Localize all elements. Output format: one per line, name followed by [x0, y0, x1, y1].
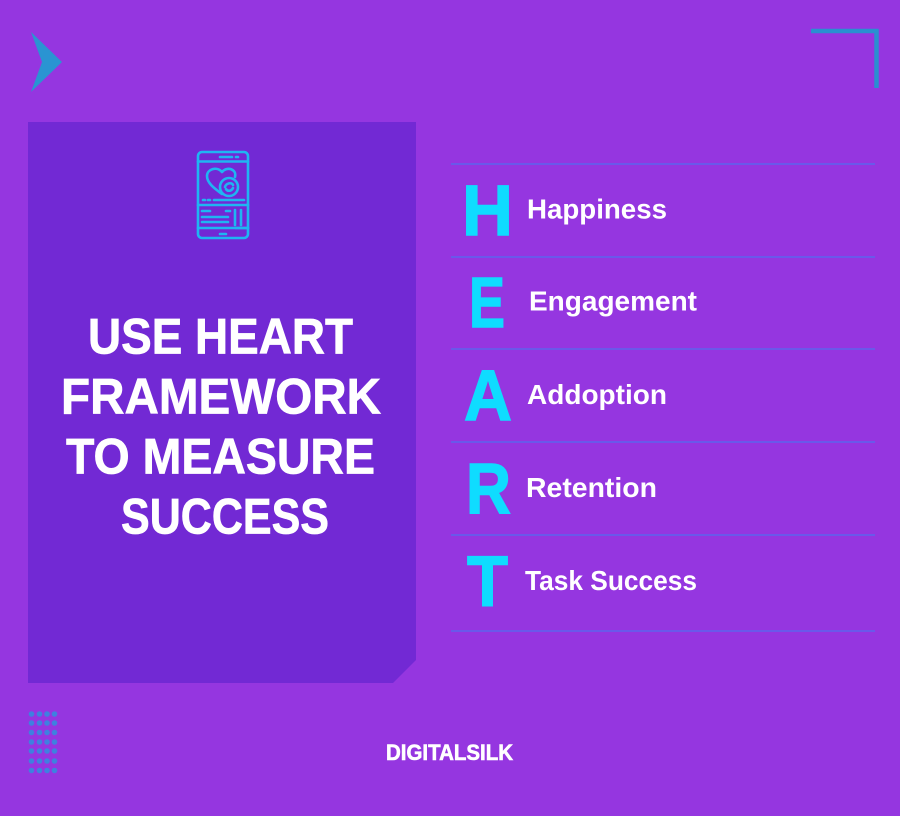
heading: SUCCESS: [121, 488, 329, 544]
list: HEART items: [462, 172, 697, 622]
item: Addoption: A: [464, 357, 512, 436]
item: Engagement: Engagement: [529, 286, 697, 316]
item: Task Success: T: [467, 543, 508, 622]
heading: [61, 308, 381, 544]
item: Retention: Retention: [526, 472, 657, 503]
item: Happiness: H: [462, 172, 513, 251]
logo: Digital Silk: DIGITALSILK: [386, 740, 513, 765]
item: Retention: [466, 450, 657, 529]
item: Engagement: [469, 264, 697, 343]
dot grid decoration: [29, 711, 57, 773]
item: Task Success: Task Success: [525, 565, 697, 596]
icon: phone with heart: [198, 152, 248, 238]
item: Task Success: [467, 543, 697, 622]
divider lines: [451, 164, 875, 631]
icon: arrow chevron top left: [31, 32, 62, 92]
item: Happiness: [462, 172, 667, 251]
item: Happiness: Happiness: [527, 194, 667, 224]
heading: FRAMEWORK: [61, 368, 381, 424]
heading: USE HEART: [88, 308, 353, 364]
item: Addoption: [464, 357, 667, 436]
panel: title card: [28, 122, 416, 683]
item: Engagement: E: [469, 264, 505, 343]
heading: TO MEASURE: [66, 428, 375, 484]
item: Retention: R: [466, 450, 511, 529]
icon: corner bracket top right: [811, 31, 876, 88]
item: Addoption: Addoption: [527, 379, 667, 410]
